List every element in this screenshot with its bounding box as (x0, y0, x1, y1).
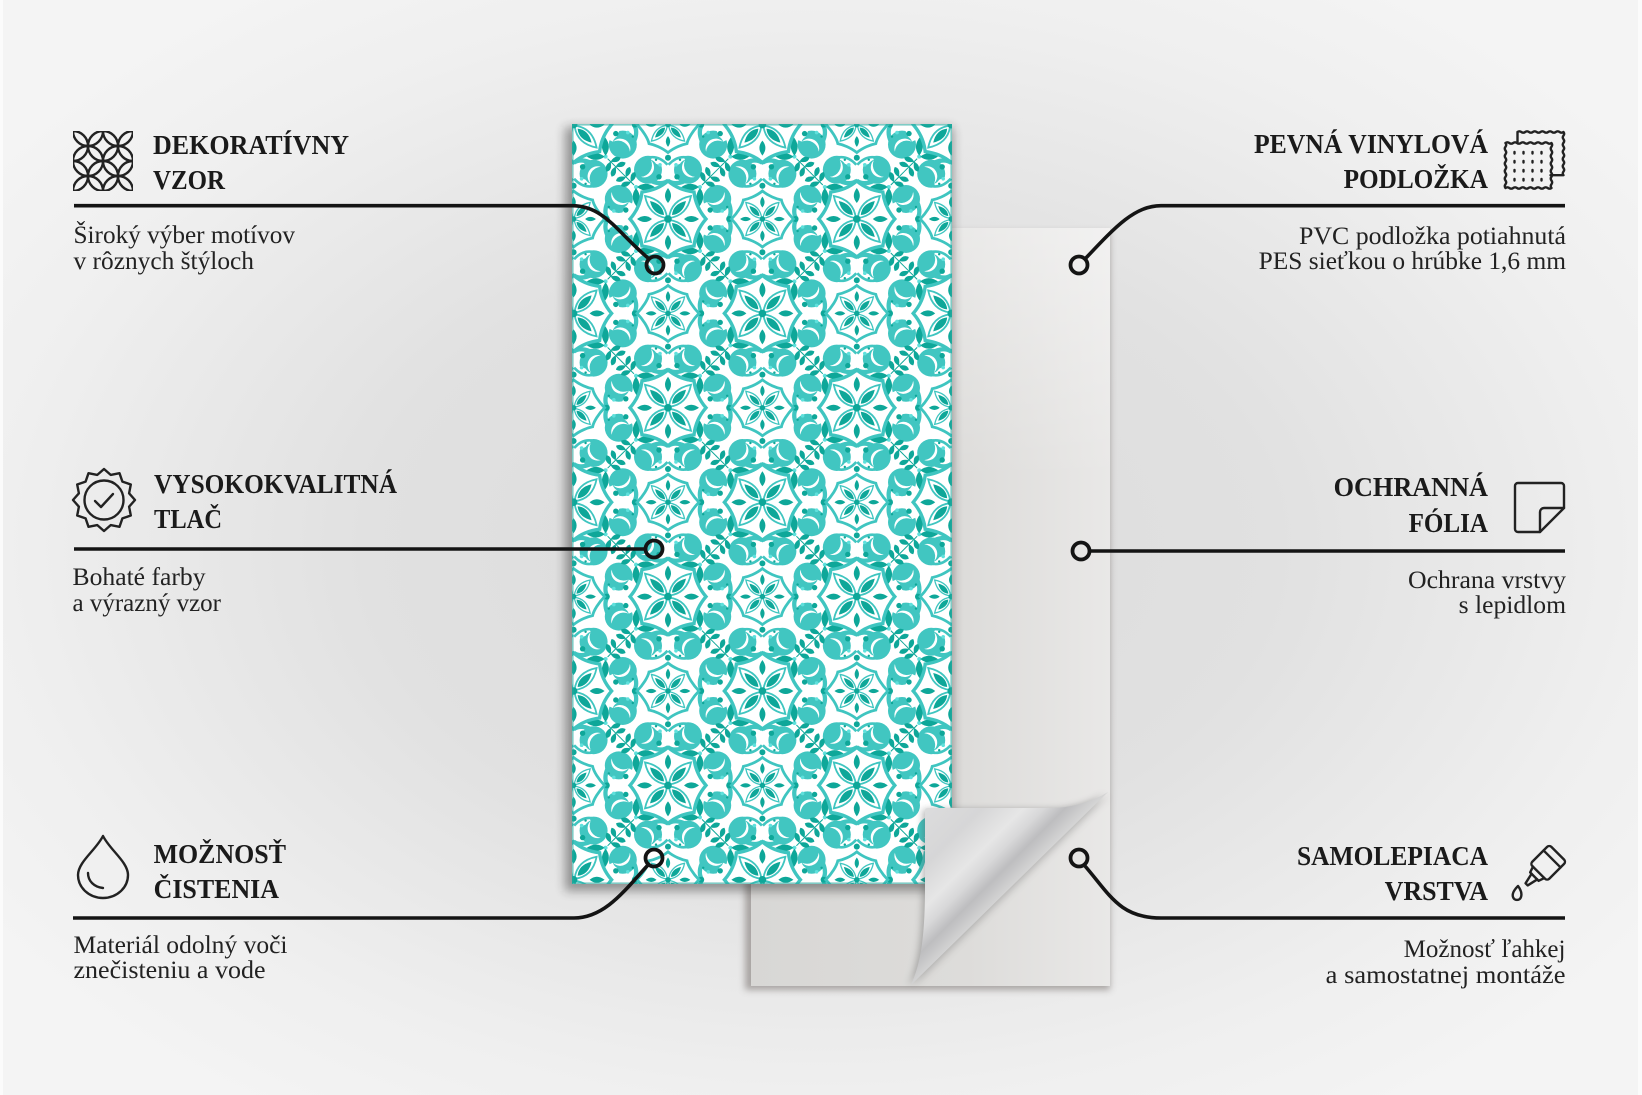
heading: TLAČ (154, 504, 222, 534)
callout: samolepiaca vrstva (1070, 841, 1566, 989)
description: Ochrana vrstvy (1408, 567, 1567, 594)
heading (1334, 472, 1488, 538)
heading: SAMOLEPIACA (1297, 841, 1488, 871)
description (1408, 567, 1567, 619)
connector line (74, 547, 646, 551)
description: Materiál odolný voči (74, 932, 288, 959)
heading: VRSTVA (1385, 876, 1488, 906)
connector line (73, 865, 648, 918)
heading: PEVNÁ VINYLOVÁ (1254, 129, 1488, 159)
connector line (1085, 206, 1565, 259)
description: v rôznych štýloch (74, 248, 255, 275)
heading (1254, 129, 1488, 194)
heading: ČISTENIA (154, 874, 279, 904)
heading (154, 469, 397, 534)
heading: PODLOŽKA (1344, 164, 1488, 194)
description (74, 220, 296, 275)
marker (646, 540, 662, 558)
connector line (1088, 549, 1565, 553)
icon: glue bottle (1513, 845, 1566, 900)
description (74, 932, 288, 984)
marker (1070, 850, 1088, 866)
heading: MOŽNOSŤ (154, 839, 286, 869)
heading: FÓLIA (1409, 508, 1488, 538)
description (1326, 936, 1566, 989)
heading: DEKORATÍVNY (153, 130, 349, 160)
description: Možnosť ľahkej (1404, 936, 1566, 963)
description: znečisteniu a vode (74, 957, 266, 984)
icon: interlaced ornament (73, 131, 133, 191)
connector line (1085, 866, 1565, 918)
icon: quality badge (73, 469, 135, 531)
marker (1070, 256, 1088, 274)
backing sheet: vinyl layer with adhesive (745, 228, 1110, 990)
heading (153, 130, 349, 195)
icon: textured mesh sheets (1505, 131, 1564, 189)
description: Bohaté farby (72, 564, 206, 591)
icon: water drop (78, 836, 128, 898)
marker (646, 256, 664, 274)
heading: OCHRANNÁ (1334, 472, 1488, 502)
heading: VYSOKOKVALITNÁ (154, 469, 397, 499)
callout: ochranná fólia (1072, 472, 1567, 619)
icon: film sheet with folded corner (1515, 483, 1564, 532)
heading: VZOR (153, 165, 225, 195)
heading (1297, 841, 1488, 906)
marker (1072, 542, 1090, 560)
callout: vysokokvalitná tlač (72, 469, 662, 617)
description: a samostatnej montáže (1326, 962, 1566, 989)
description: PVC podložka potiahnutá (1299, 223, 1566, 250)
marker (646, 850, 662, 866)
callout: možnosť čistenia (73, 836, 662, 984)
description: a výrazný vzor (72, 590, 222, 617)
panel: decorative tile pattern (558, 120, 960, 898)
description: PES sieťkou o hrúbke 1,6 mm (1259, 248, 1567, 275)
description (1259, 223, 1567, 275)
connector line (74, 206, 648, 258)
description (72, 564, 222, 617)
peeled corner of protective film (908, 792, 1111, 988)
callout: pevná vinylová podložka (1070, 129, 1567, 275)
description: s lepidlom (1459, 592, 1567, 619)
callout: dekoratívny vzor (73, 130, 666, 276)
description: Široký výber motívov (74, 220, 296, 249)
heading (154, 839, 286, 904)
